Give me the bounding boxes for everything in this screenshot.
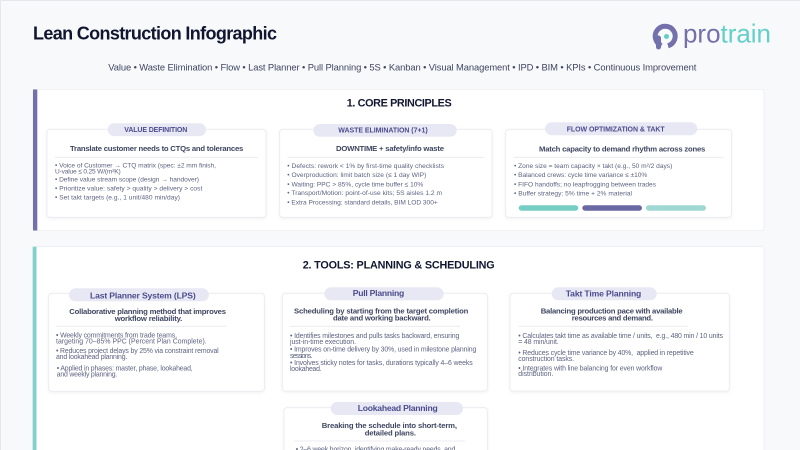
card: value definition: Translate customer needs to CTQs and tolerances — [70, 144, 243, 153]
panel: core principles — [33, 90, 764, 230]
card: value definition — [47, 123, 266, 217]
card: last planner system: • Reduces project delays by 25% via constraint removal — [56, 348, 219, 355]
card: pull planning: Scheduling by starting from the target completion — [294, 306, 469, 315]
card: pull planning: just-in-time execution. — [289, 339, 356, 346]
progress bars — [519, 205, 706, 211]
card: lookahead planning — [284, 402, 487, 450]
card: value definition: • Voice of Customer → CTQ matrix (spec: ±2 mm finish, — [55, 162, 216, 170]
card: lookahead planning: Breaking the schedule into short-term, — [322, 421, 457, 430]
card: takt time planning: distribution. — [518, 371, 553, 378]
card: pull planning: date and working backward. — [333, 313, 431, 322]
card: lookahead planning: detailed plans. — [365, 428, 416, 437]
card: value definition: VALUE DEFINITION — [124, 127, 187, 134]
card: pull planning: Pull Planning — [353, 288, 404, 298]
card: takt time planning: = 48 min/unit. — [518, 339, 559, 346]
card: pull planning: • Identifies milestones and pulls tasks backward, ensuring — [290, 333, 459, 340]
card: takt time planning: Takt Time Planning — [566, 288, 641, 298]
card: takt time planning: construction tasks. — [518, 356, 574, 363]
card: flow optimization and takt — [506, 122, 731, 217]
card: lookahead planning: Lookahead Planning — [358, 403, 438, 413]
card: last planner system: Collaborative planning method that improves — [69, 307, 226, 316]
card: last planner system: targeting 70–85% PPC (Percent Plan Complete). — [56, 338, 207, 346]
card: waste elimination: WASTE ELIMINATION (7+1) — [338, 128, 428, 134]
card: takt time planning: Balancing production pace with available — [541, 306, 683, 315]
subtitle: topic list: Value • Waste Elimination • Flow • Last Planner • Pull Planning • 5S • Kanban • Visual Management • IPD • BIM • KPIs • Continuous Improvement — [108, 61, 697, 72]
card: takt time planning: • Calculates takt time as available time / units, e.g., 480 min / 10 units — [518, 333, 724, 340]
card: value definition: • Define value stream scope (design → handover) — [55, 176, 199, 184]
card: waste elimination — [280, 124, 492, 217]
heading: tools: 2. TOOLS: PLANNING & SCHEDULING — [303, 259, 495, 271]
card: last planner system — [49, 288, 264, 391]
card: last planner system: • Weekly commitments from trade teams, — [56, 332, 177, 340]
card: last planner system: Last Planner System (LPS) — [90, 290, 196, 300]
card: flow optimization and takt: FLOW OPTIMIZATION & TAKT — [567, 126, 665, 134]
card: last planner system: • Applied in phases: master, phase, lookahead, — [57, 366, 193, 372]
logo: protrain: protrain — [683, 18, 771, 48]
card: last planner system: and weekly planning. — [57, 372, 117, 378]
card: waste elimination: • Overproduction: limit batch size (≤ 1 day WIP) — [287, 172, 426, 179]
card: waste elimination: • Transport/Motion: point-of-use kits; 5S aisles 1.2 m — [287, 190, 442, 197]
card: waste elimination: • Extra Processing: standard details, BIM LOD 300+ — [287, 199, 438, 206]
card: flow optimization and takt: • Zone size = team capacity × takt (e.g., 50 m²/2 days) — [514, 163, 672, 170]
card: flow optimization and takt: • Buffer strategy: 5% time + 2% material — [514, 190, 633, 197]
card: flow optimization and takt: Match capacity to demand rhythm across zones — [539, 144, 705, 153]
card: flow optimization and takt: • Balanced crews: cycle time variance ≤ ±10% — [514, 172, 647, 179]
card: value definition: U-value ≤ 0.25 W/(m²K) — [55, 168, 121, 176]
card: pull planning — [282, 287, 487, 391]
card: last planner system: workflow reliability. — [114, 314, 182, 323]
card: waste elimination: DOWNTIME + safety/info waste — [336, 144, 445, 153]
card: takt time planning — [510, 287, 729, 391]
card: flow optimization and takt: • FIFO handoffs; no leapfrogging between trades — [514, 181, 657, 188]
card: last planner system: and lookahead planning. — [56, 354, 127, 361]
card: pull planning: • Improves on-time delivery by 30%, used in milestone planning — [290, 346, 476, 354]
card: waste elimination: • Defects: rework < 1% by first-time quality checklists — [287, 163, 445, 170]
card: value definition: • Set takt targets (e.g., 1 unit/480 min/day) — [55, 194, 180, 202]
card: takt time planning: • Integrates with line balancing for even workflow — [518, 366, 662, 372]
card: pull planning: • Involves sticky notes for tasks, durations typically 4–6 weeks — [290, 360, 473, 367]
card: pull planning: lookahead. — [290, 366, 322, 373]
card: waste elimination: • Waiting: PPC > 85%, cycle time buffer ≤ 10% — [287, 181, 423, 188]
card: takt time planning: resources and demand. — [572, 314, 653, 323]
card: takt time planning: • Reduces cycle time variance by 40%, applied in repetitive — [518, 350, 694, 357]
title: Lean Construction Infographic — [33, 24, 277, 44]
panel: tools planning and scheduling — [33, 247, 764, 450]
card: pull planning: sessions. — [290, 353, 312, 360]
heading: core principles: 1. CORE PRINCIPLES — [347, 97, 452, 109]
card: value definition: • Prioritize value: safety > quality > delivery > cost — [55, 186, 202, 192]
